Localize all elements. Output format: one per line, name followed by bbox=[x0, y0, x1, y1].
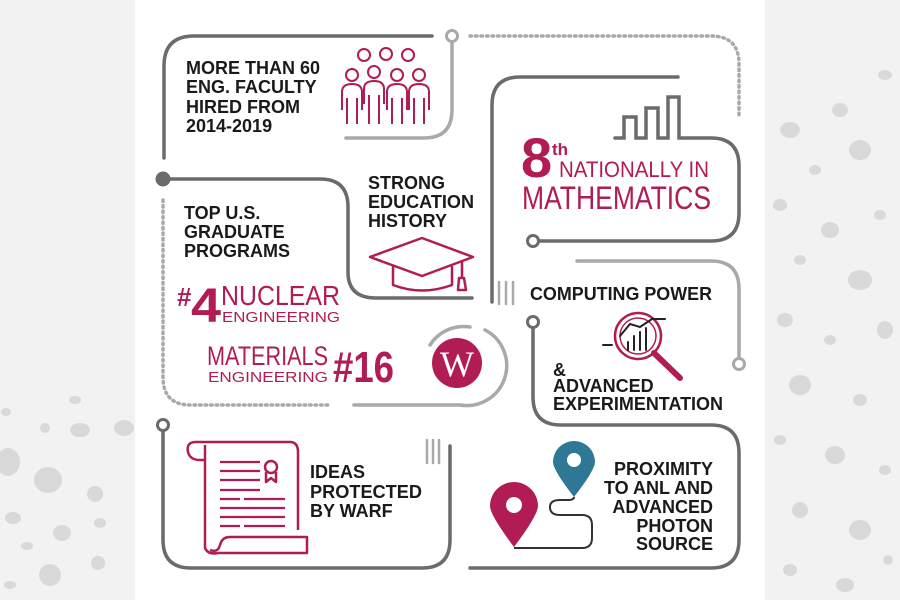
text: education bbox=[368, 173, 474, 231]
text: faculty bbox=[186, 58, 320, 136]
text: proximity bbox=[604, 459, 713, 554]
text: proximity: SOURCE bbox=[636, 534, 713, 554]
text: education: HISTORY bbox=[368, 211, 447, 231]
text: warf: BY WARF bbox=[310, 501, 393, 521]
8th mathematics bbox=[521, 126, 711, 216]
8th mathematics: 8 bbox=[521, 126, 552, 189]
text: proximity: TO ANL AND bbox=[604, 478, 713, 498]
white panel bbox=[135, 0, 765, 600]
text: warf: IDEAS bbox=[310, 462, 365, 482]
text: computing: EXPERIMENTATION bbox=[553, 394, 723, 414]
text: warf: PROTECTED bbox=[310, 482, 422, 502]
icon: scroll bbox=[188, 442, 307, 553]
8th mathematics: NATIONALLY IN bbox=[559, 157, 709, 182]
text: education: STRONG bbox=[368, 173, 445, 193]
connector lines bbox=[163, 36, 739, 568]
materials engineering: MATERIALS bbox=[207, 341, 328, 371]
text: computing: & bbox=[553, 360, 566, 380]
icon: map pins bbox=[490, 441, 595, 548]
icon: magnifier bbox=[603, 313, 680, 378]
8th mathematics: MATHEMATICS bbox=[522, 180, 711, 216]
text: proximity: ADVANCED bbox=[612, 497, 713, 517]
icon: W logo bbox=[432, 338, 482, 388]
connector nodes bbox=[157, 30, 744, 430]
nuclear engineering: NUCLEAR bbox=[221, 280, 340, 311]
text: faculty: MORE THAN 60 bbox=[186, 58, 320, 78]
text: proximity: PROXIMITY bbox=[614, 459, 713, 479]
text: graduate programs: PROGRAMS bbox=[184, 241, 290, 261]
nuclear engineering: # bbox=[177, 282, 192, 312]
text: computing: COMPUTING POWER bbox=[530, 284, 712, 304]
text: education: EDUCATION bbox=[368, 192, 474, 212]
text: faculty: ENG. FACULTY bbox=[186, 77, 317, 97]
text: graduate programs: GRADUATE bbox=[184, 222, 285, 242]
text: graduate programs bbox=[184, 203, 290, 261]
text: faculty: HIRED FROM bbox=[186, 97, 300, 117]
icon: people bbox=[342, 48, 429, 124]
icon: grad cap bbox=[370, 238, 473, 290]
nuclear engineering: ENGINEERING bbox=[222, 309, 340, 326]
text: computing: ADVANCED bbox=[553, 376, 654, 396]
materials engineering bbox=[207, 341, 394, 392]
8th mathematics: th bbox=[552, 140, 568, 159]
materials engineering: #16 bbox=[333, 343, 394, 392]
text: graduate programs: TOP U.S. bbox=[184, 203, 260, 223]
icon: W logo: W bbox=[440, 344, 474, 384]
text: computing bbox=[530, 284, 723, 414]
text: warf bbox=[310, 462, 422, 521]
text: proximity: PHOTON bbox=[636, 516, 713, 536]
text: faculty: 2014-2019 bbox=[186, 116, 272, 136]
materials engineering: ENGINEERING bbox=[208, 369, 328, 386]
nuclear engineering bbox=[177, 280, 340, 333]
nuclear engineering: 4 bbox=[191, 280, 221, 333]
